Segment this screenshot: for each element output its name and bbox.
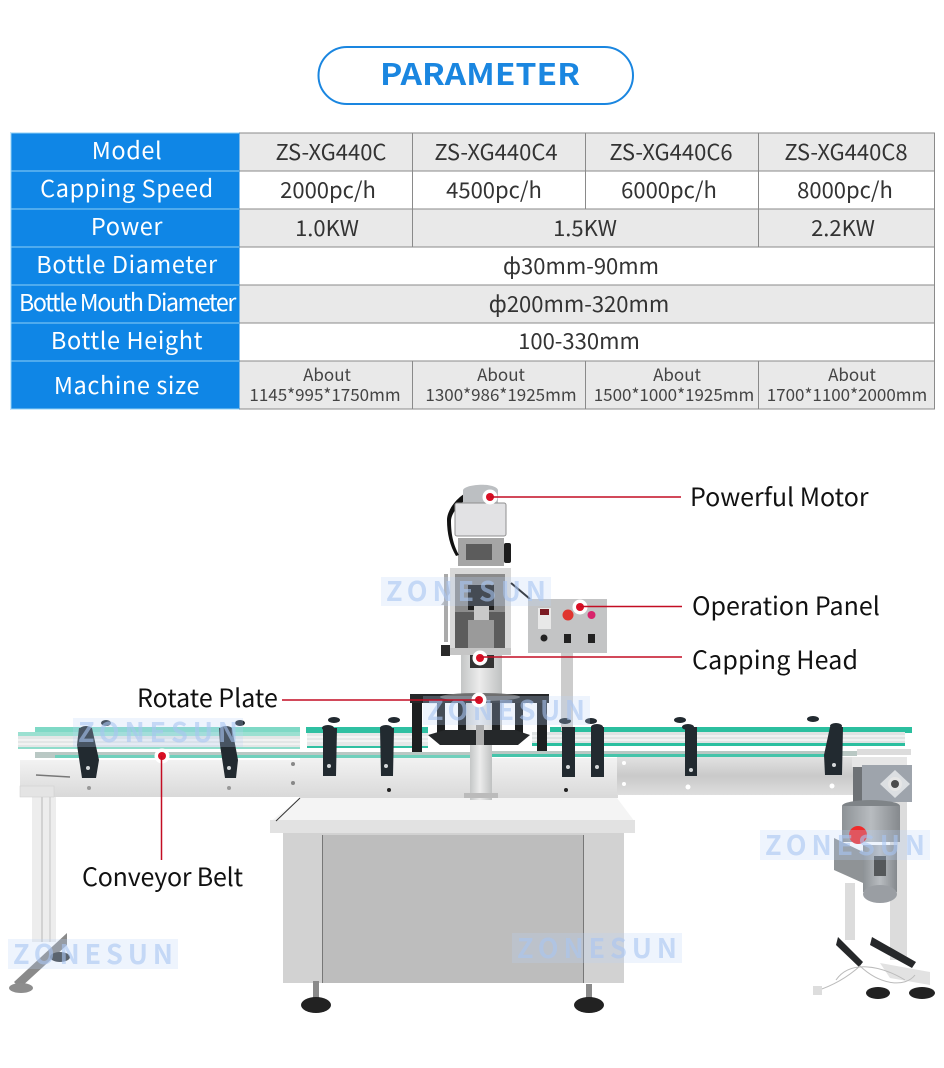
capping speed row: 4500pc/h [446,173,542,205]
header column: Bottle Diameter [36,246,218,280]
operation panel [511,583,607,731]
capping machine illustration [9,485,935,1013]
callout: rotate plate [137,679,486,715]
left leg of conveyor [9,797,70,993]
capping speed row: 6000pc/h [621,173,717,205]
machine size row: 1500*1000*1925mm [594,381,754,406]
callout: capping head [472,641,858,677]
callout: conveyor belt [82,748,244,894]
callout: powerful motor [482,478,869,514]
clamp highlights [86,763,836,772]
row backgrounds [239,133,935,409]
machine size row [249,361,927,406]
model row: ZS-XG440C [276,135,386,167]
watermark 5: ZONESUN [13,933,173,972]
watermarks [8,570,930,972]
cabinet [283,833,624,983]
callout: rotate plate: Rotate Plate [137,679,278,715]
conveyor chain [35,749,911,758]
watermark 2: ZONESUN [78,711,238,750]
geared motor [834,757,912,960]
title pill [318,47,633,104]
clamps [77,716,843,778]
cabinet feet [301,981,604,1013]
bottle height value: 100-330mm [518,324,640,356]
machine size row: About [477,361,526,386]
callout: powerful motor: Powerful Motor [690,478,869,514]
power row: 1.5KW [553,211,617,243]
machine size row: 1300*986*1925mm [425,381,577,406]
bottle diameter value: ф30mm-90mm [503,249,659,281]
watermark 6: ZONESUN [517,927,677,966]
machine size row: About [828,361,877,386]
capping speed row: 2000pc/h [280,173,376,205]
watermark 1: ZONESUN [386,570,546,609]
machine size row: 1700*1100*2000mm [767,381,927,406]
header column: Bottle Mouth Diameter [19,284,237,318]
watermark 3: ZONESUN [427,689,585,728]
parameter table [10,132,935,410]
power row [295,211,875,243]
callout: operation panel: Operation Panel [692,587,880,623]
header column: Model [92,132,162,166]
machine size row: About [653,361,702,386]
model row [276,135,908,167]
gearbox [458,538,511,566]
left guide rail [18,727,428,749]
callout: operation panel [572,587,880,623]
callout: conveyor belt: Conveyor Belt [82,858,244,894]
conveyor beam [20,757,853,798]
capping speed row [280,173,893,205]
capping head frame [441,568,511,668]
bottle mouth diameter value: ф200mm-320mm [489,287,669,319]
power row: 1.0KW [295,211,359,243]
model row: ZS-XG440C8 [784,135,908,167]
header column: Bottle Height [51,322,203,356]
table top [270,798,635,833]
capping speed row: 8000pc/h [797,173,893,205]
header column: Capping Speed [40,170,214,204]
motor stand base [813,937,935,999]
rotate plate [410,693,549,752]
right guide rail [532,727,912,746]
callout: capping head: Capping Head [692,641,858,677]
title text: PARAMETER [380,50,580,94]
machine size row: About [303,361,352,386]
central column [461,655,502,800]
header column: Power [91,208,163,242]
header column [10,132,240,410]
machine size row: 1145*995*1750mm [249,381,401,406]
model row: ZS-XG440C6 [609,135,733,167]
model row: ZS-XG440C4 [434,135,558,167]
motor top [447,485,506,556]
watermark 4: ZONESUN [765,824,925,863]
header column: Machine size [54,367,200,401]
table grid [239,133,934,409]
power row: 2.2KW [811,211,875,243]
